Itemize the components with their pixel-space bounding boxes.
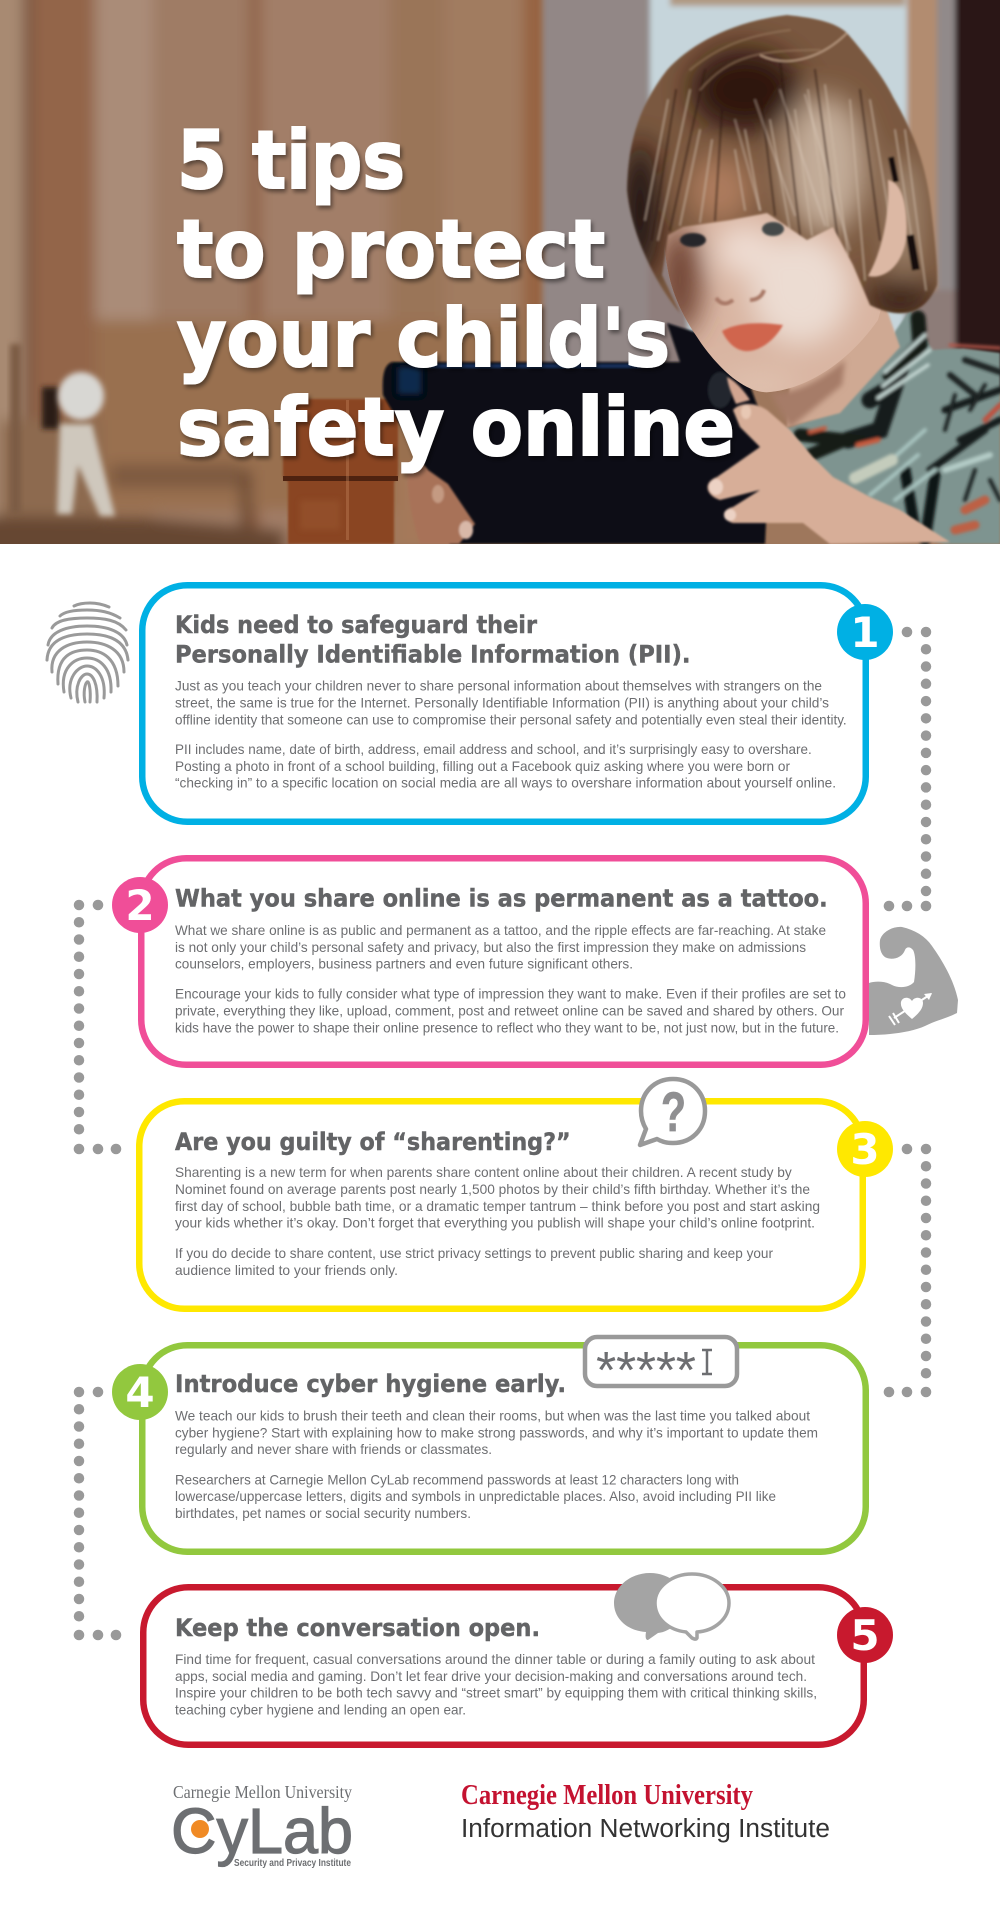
title: your child's (177, 292, 670, 385)
body text: tip 2: is not only your child’s personal safety and privacy, but also the first impression they make on admissions (175, 939, 806, 955)
wall, window and door frame (543, 0, 1000, 390)
body text: tip 4: lowercase/uppercase letters, digits and symbols in unpredictable places. Also, avoid including PII like (175, 1488, 776, 1504)
icon: question speech bubble: ? (661, 1080, 686, 1143)
number badge 2 (112, 877, 168, 933)
body text: tip 1: Posting a photo in front of a school building, filling out a Facebook quiz asking where you were born or (175, 758, 790, 774)
hair (626, 13, 938, 315)
number badge 5: 5 (850, 1611, 880, 1660)
body text: tip 3: your kids whether it’s okay. Don’t forget that everything you publish will shape your child’s online footprint. (175, 1215, 815, 1231)
connector dots: tip 2 to tip 3 (74, 900, 121, 1154)
hero photo: boy using a tablet (0, 0, 1000, 570)
icon: two chat bubbles (614, 1573, 729, 1640)
body text: tip 3: Nominet found on average parents post nearly 1,500 photos by their child’s fifth birthday. Whether it’s the (175, 1181, 810, 1197)
body text: tip 5: Find time for frequent, casual conversations around the dinner table or during a family outing to ask about (175, 1651, 815, 1667)
icon: question speech bubble (640, 1079, 705, 1145)
number badge 1: 1 (850, 608, 880, 657)
title (177, 114, 735, 474)
heading: tip 3: Are you guilty of “sharenting?” (175, 1128, 571, 1156)
heading: tip 1: Personally Identifiable Information (PII). (175, 640, 690, 668)
number badge 5 (837, 1607, 893, 1663)
body text: tip 1: offline identity that someone can use to compromise their personal safety and potentially even steal their identity. (175, 711, 847, 727)
logo: CMU CyLab: CyLab (171, 1795, 353, 1867)
logo: CMU Information Networking Institute: Carnegie Mellon University (461, 1780, 753, 1811)
heading: tip 1 (175, 611, 690, 668)
connector dots: tip 4 to tip 5 (74, 1387, 121, 1640)
white figure (10, 344, 115, 516)
connector dots: tip 1 to tip 2 (884, 627, 931, 911)
body text: tip 3: audience limited to your friends only. (175, 1262, 398, 1278)
glass (283, 399, 398, 544)
icon: password field: ***** (596, 1342, 696, 1400)
right hand (708, 377, 950, 544)
nose, eyes and mouth (680, 222, 784, 351)
body text: tip 4: regularly and never share with friends or classmates. (175, 1441, 492, 1457)
title: to protect (177, 203, 605, 296)
panel: tip 4 (142, 1345, 866, 1552)
body text: tip 4: We teach our kids to brush their teeth and clean their rooms, but when was the last time you talked about (175, 1408, 810, 1424)
body text: tip 2: kids have the power to shape their online presence to reflect who they want to be, not just now, but in the future. (175, 1019, 839, 1035)
body text: tip 3: If you do decide to share content, use strict privacy settings to prevent public sharing and keep your (175, 1245, 773, 1261)
body text: tip 5: teaching cyber hygiene and lending an open ear. (175, 1702, 466, 1718)
body text: tip 2 (175, 922, 846, 1035)
body text: tip 1: “checking in” to a specific location on social media are all ways to overshare information about yourself online. (175, 775, 836, 791)
logo: CMU CyLab: Carnegie Mellon University (173, 1782, 352, 1802)
shirt (780, 310, 1000, 544)
number badge 4 (112, 1364, 168, 1420)
number badge 4: 4 (125, 1368, 155, 1417)
number badge 3: 3 (850, 1125, 880, 1174)
body text: tip 1: Just as you teach your children never to share personal information about themselves with strangers on the (175, 678, 822, 694)
number badge 3 (837, 1121, 893, 1177)
body text: tip 3: Sharenting is a new term for when parents share content online about their children. A recent study by (175, 1164, 792, 1180)
body text: tip 2: counselors, employers, business partners and even future significant others. (175, 956, 633, 972)
body text: tip 4: Researchers at Carnegie Mellon CyLab recommend passwords at least 12 characters long with (175, 1471, 739, 1487)
title: safety online (177, 381, 735, 474)
heading: tip 4: Introduce cyber hygiene early. (175, 1370, 566, 1398)
logo: CMU CyLab: Security and Privacy Institute (234, 1858, 351, 1869)
body text: tip 1 (175, 678, 847, 791)
body text: tip 3: first day of school, bubble bath time, or a dramatic temper tantrum – think before you post and start asking (175, 1198, 820, 1214)
body text: tip 1: PII includes name, date of birth, address, email address and school, and it’s surprisingly easy to overshare. (175, 741, 812, 757)
connector dots: tip 3 to tip 4 (884, 1144, 931, 1397)
body text: tip 2: private, everything they like, upload, comment, post and retweet online can be saved and shared by others. Our (175, 1002, 844, 1018)
body text: tip 5: apps, social media and gaming. Don’t let fear drive your decision-making and conversations around tech. (175, 1668, 807, 1684)
panel: tip 2 (141, 858, 866, 1065)
body text: tip 4 (175, 1408, 818, 1521)
heart and arrow (889, 993, 932, 1025)
body text: tip 4: cyber hygiene? Start with explaining how to make strong passwords, and why it’s important to update them (175, 1424, 818, 1440)
number badge 1 (837, 604, 893, 660)
heading: tip 1: Kids need to safeguard their (175, 611, 537, 639)
body text: tip 5 (175, 1651, 817, 1718)
number badge 2: 2 (125, 881, 155, 930)
panel: tip 1 (142, 585, 866, 822)
tablet (383, 323, 770, 544)
ear (868, 180, 907, 277)
icon: fingerprint (47, 603, 128, 702)
body text: tip 3 (175, 1164, 820, 1278)
heading: tip 5: Keep the conversation open. (175, 1614, 540, 1642)
heading: tip 2: What you share online is as permanent as a tattoo. (175, 885, 828, 913)
body text: tip 2: Encourage your kids to fully consider what type of impression they want to make. Even if their profiles are set to (175, 986, 846, 1002)
left hand (423, 465, 476, 544)
neck and face (665, 212, 901, 428)
title: 5 tips (177, 114, 405, 207)
body text: tip 5: Inspire your children to be both tech savvy and “street smart” by equipping them with critical thinking skills, (175, 1685, 817, 1701)
icon: password field (585, 1337, 737, 1400)
panel: tip 5 (143, 1587, 864, 1745)
icon: flexed arm with heart tattoo (869, 927, 958, 1035)
logo: CMU Information Networking Institute (461, 1780, 830, 1843)
body text: tip 2: What we share online is as public and permanent as a tattoo, and the ripple effects are far-reaching. At stake (175, 922, 826, 938)
logo: CMU Information Networking Institute: Information Networking Institute (461, 1815, 830, 1843)
body text: tip 4: birthdates, pet names or social security numbers. (175, 1505, 471, 1521)
body text: tip 1: street, the same is true for the Internet. Personally Identifiable Information (PII) is anything about your child’s (175, 695, 829, 711)
panel: tip 3 (139, 1101, 863, 1309)
